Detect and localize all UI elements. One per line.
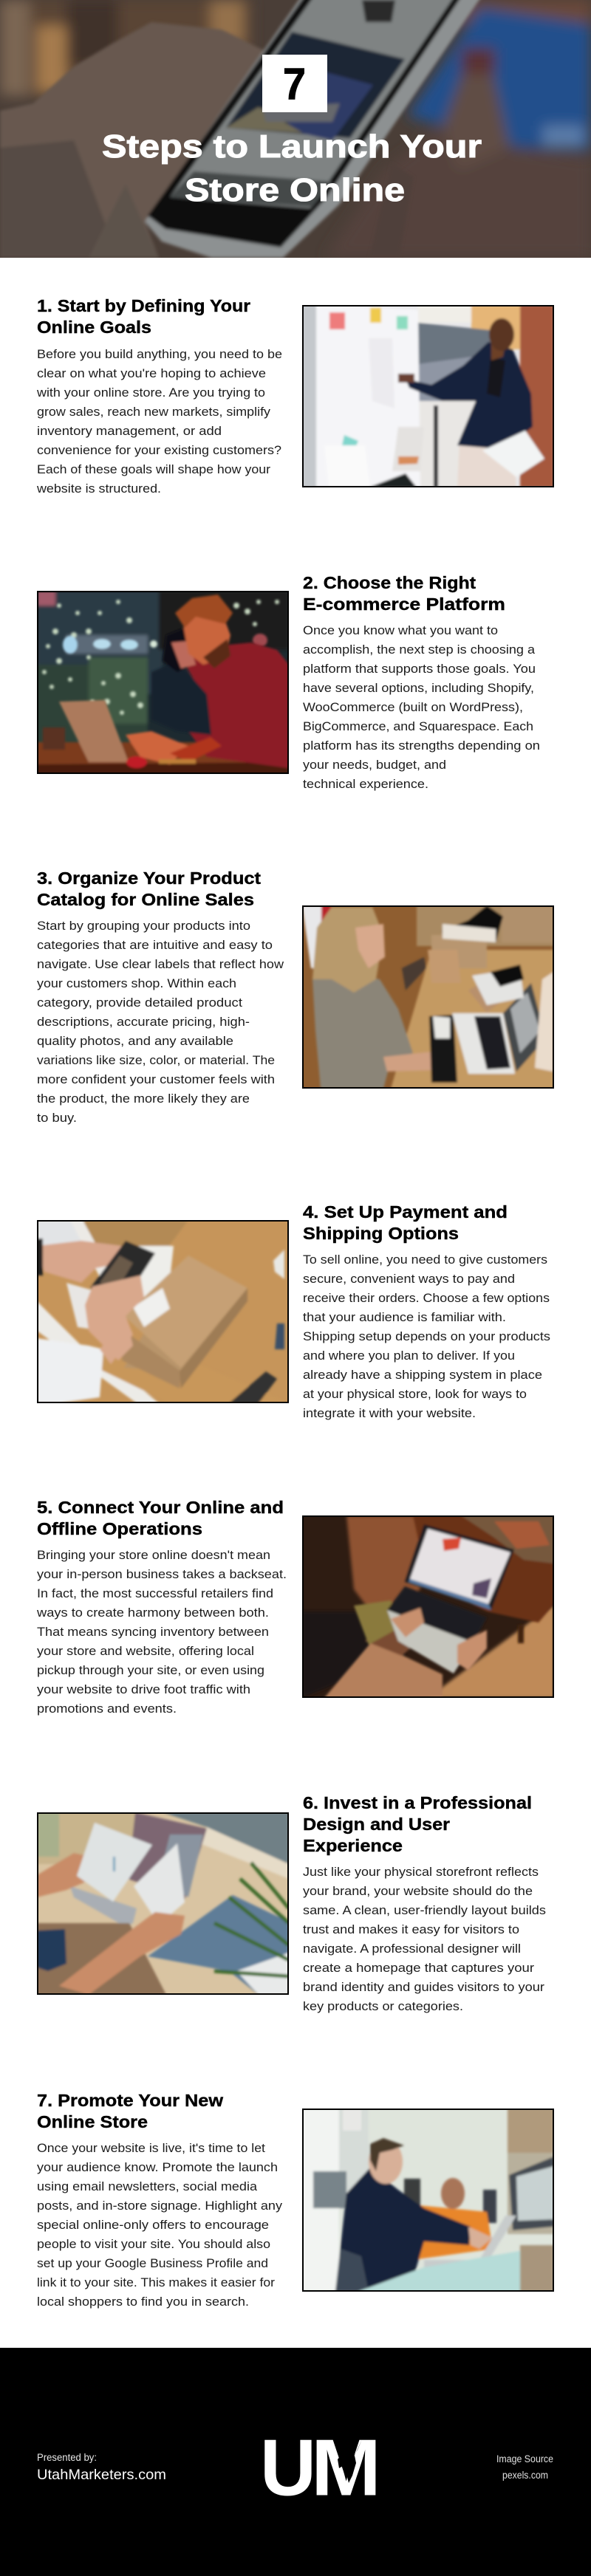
text block: step 6: Just like your physical storefront reflects	[303, 1865, 539, 1879]
title	[102, 129, 482, 208]
heading: step 3: 3. Organize Your Product	[37, 869, 261, 888]
text block: step 4: To sell online, you need to give customers	[303, 1253, 547, 1267]
text block: step 3: more confident your customer feels with	[37, 1072, 275, 1086]
text block: step 3: the product, the more likely they are	[37, 1092, 250, 1106]
text block: step 5: promotions and events.	[37, 1702, 177, 1716]
text block: step 6: navigate. A professional designer will	[303, 1942, 521, 1956]
heading: step 3	[37, 869, 261, 909]
text block: step 7: set up your Google Business Profile and	[37, 2256, 268, 2270]
panel: step 7	[37, 2091, 554, 2309]
text block: step 1: website is structured.	[36, 482, 161, 496]
text block: step 7: Once your website is live, it's time to let	[37, 2141, 265, 2155]
text block: step 5: your in-person business takes a backseat.	[37, 1567, 287, 1581]
text block: step 2: accomplish, the next step is choosing a	[303, 643, 536, 657]
text block: step 4: Shipping setup depends on your products	[303, 1329, 550, 1343]
header background photo: hand holding phone and card	[0, 0, 591, 258]
text block: step 2: BigCommerce, and Squarespace. Each	[303, 719, 533, 733]
text block: step 6: same. A clean, user-friendly layout builds	[303, 1903, 546, 1917]
text block: step 2: platform has its strengths depending on	[303, 739, 540, 753]
text block: step 2: WooCommerce (built on WordPress),	[303, 700, 523, 714]
text block: step 5: In fact, the most successful retailers find	[37, 1586, 273, 1600]
heading: step 4	[303, 1202, 508, 1243]
text block: step 4: secure, convenient ways to pay and	[303, 1272, 515, 1286]
text block: step 4: at your physical store, look for ways to	[303, 1387, 527, 1401]
text block: step 7: posts, and in-store signage. Highlight any	[37, 2199, 283, 2213]
text block: step 1: with your online store. Are you trying to	[36, 386, 265, 400]
heading: step 6	[303, 1793, 532, 1855]
text block: step 7: link it to your site. This makes it easier for	[37, 2275, 275, 2289]
text block: step 3: Start by grouping your products into	[37, 919, 250, 933]
text block: step 3: quality photos, and any available	[37, 1034, 233, 1048]
text block: step 4: already have a shipping system in place	[303, 1368, 542, 1382]
text block: step 4: and where you plan to deliver. If you	[303, 1349, 515, 1363]
text block: step 3: descriptions, accurate pricing, high-	[37, 1015, 250, 1029]
heading: step 1	[37, 296, 250, 337]
UM logo: M	[311, 2422, 381, 2512]
text block: step 6: your brand, your website should do the	[303, 1884, 533, 1898]
image source credit: Image Source	[496, 2453, 553, 2464]
panel: step 4	[37, 1202, 550, 1420]
photo: woman browsing store on laptop	[302, 1515, 554, 1698]
image source credit	[496, 2453, 553, 2481]
presented by credit	[37, 2452, 166, 2483]
heading: step 1: 1. Start by Defining Your	[37, 296, 250, 315]
text block: step 6	[303, 1865, 546, 2013]
heading: step 5	[37, 1498, 284, 1538]
heading: step 6: Design and User	[303, 1815, 450, 1834]
text block: step 2	[303, 623, 540, 791]
heading: step 5: 5. Connect Your Online and	[37, 1498, 284, 1517]
heading: step 4: 4. Set Up Payment and	[303, 1202, 508, 1222]
text block: step 2: Once you know what you want to	[303, 623, 498, 637]
text block: step 2: your needs, budget, and	[303, 758, 446, 772]
heading: step 2	[303, 573, 505, 614]
number badge: 7	[283, 59, 306, 109]
text block: step 5: Bringing your store online doesn't mean	[37, 1548, 270, 1562]
text block: step 2: technical experience.	[303, 777, 428, 791]
text block: step 4	[303, 1253, 550, 1420]
icon: mountain in logo	[338, 2439, 362, 2483]
presented by credit: UtahMarketers.com	[37, 2467, 166, 2483]
heading: step 2: E-commerce Platform	[303, 595, 505, 614]
panel: step 1	[36, 296, 554, 496]
photo: woman packing sneakers at desk	[302, 905, 554, 1089]
text block: step 5: That means syncing inventory between	[37, 1625, 269, 1639]
text block: step 5: ways to create harmony between both.	[36, 1606, 269, 1620]
text block: step 7: local shoppers to find you in search.	[37, 2295, 249, 2309]
text block: step 3: to buy.	[37, 1111, 77, 1125]
heading: step 5: Offline Operations	[37, 1519, 202, 1538]
photo: two men pointing at a laptop	[302, 2109, 554, 2292]
text block: step 1	[36, 347, 282, 496]
text block: step 3: categories that are intuitive and easy to	[37, 938, 273, 952]
text block: step 4: receive their orders. Choose a few options	[303, 1291, 550, 1305]
text block: step 7: your audience know. Promote the launch	[37, 2160, 278, 2174]
number badge	[262, 55, 327, 112]
text block: step 2: have several options, including Shopify,	[303, 681, 534, 695]
text block: step 1: Each of these goals will shape how your	[37, 462, 271, 476]
heading: step 4: Shipping Options	[303, 1224, 459, 1243]
panel: step 5	[36, 1498, 554, 1716]
text block: step 5	[36, 1548, 287, 1716]
text block: step 3: variations like size, color, or material. The	[37, 1053, 275, 1067]
text block: step 3: your customers shop. Within each	[37, 976, 236, 990]
text block: step 6: trust and makes it easy for visitors to	[303, 1922, 519, 1936]
text block: step 6: key products or categories.	[303, 1999, 463, 2013]
heading: step 6: 6. Invest in a Professional	[303, 1793, 532, 1812]
photo: designer reviewing printed layouts	[37, 1812, 289, 1995]
text block: step 1: clear on what you're hoping to achieve	[37, 366, 266, 380]
photo: couple at laptop with bokeh lights	[37, 591, 289, 774]
text block: step 7: using email newsletters, social media	[37, 2179, 258, 2193]
text block: step 3: category, provide detailed product	[37, 996, 242, 1010]
text block: step 4: that your audience is familiar with.	[303, 1310, 506, 1324]
UM logo: U	[260, 2422, 316, 2512]
text block: step 6: create a homepage that captures your	[303, 1961, 535, 1975]
heading: step 2: 2. Choose the Right	[303, 573, 476, 592]
text block: step 5: your store and website, offering local	[37, 1644, 254, 1658]
heading: step 3: Catalog for Online Sales	[37, 890, 254, 909]
panel: step 3	[37, 869, 554, 1125]
text block: step 3: navigate. Use clear labels that reflect how	[37, 957, 284, 971]
panel: step 6	[37, 1793, 546, 2013]
text block: step 5: your website to drive foot traffic with	[37, 1682, 250, 1696]
text block: step 4: integrate it with your website.	[303, 1406, 476, 1420]
heading: step 6: Experience	[303, 1836, 403, 1855]
footer	[0, 2348, 591, 2576]
text block: step 7: special online-only offers to encourage	[37, 2218, 269, 2232]
presented by credit: Presented by:	[37, 2452, 97, 2463]
text block: step 1: grow sales, reach new markets, simplify	[37, 405, 271, 419]
photo: scanning a package label with a phone	[37, 1220, 289, 1403]
text block: step 2: platform that supports those goals. You	[303, 662, 536, 676]
UM logo	[260, 2422, 381, 2512]
text block: step 1: convenience for your existing customers?	[37, 443, 281, 457]
text block: step 6: brand identity and guides visitors to your	[303, 1980, 545, 1994]
photo: woman presenting at whiteboard	[302, 305, 554, 487]
title: Steps to Launch Your	[102, 129, 482, 165]
text block: step 7	[37, 2141, 283, 2309]
heading: step 7	[37, 2091, 224, 2131]
image source credit: pexels.com	[502, 2470, 548, 2481]
heading: step 1: Online Goals	[37, 318, 151, 337]
heading: step 7: Online Store	[37, 2112, 148, 2131]
heading: step 7: 7. Promote Your New	[37, 2091, 224, 2110]
title: Store Online	[185, 172, 405, 208]
text block: step 1: inventory management, or add	[37, 424, 222, 438]
panel: step 2	[37, 573, 540, 791]
header banner	[0, 0, 591, 258]
text block: step 7: people to visit your site. You should also	[37, 2237, 270, 2251]
text block: step 3	[37, 919, 284, 1125]
text block: step 1: Before you build anything, you need to be	[37, 347, 282, 361]
text block: step 5: pickup through your site, or even using	[37, 1663, 264, 1677]
